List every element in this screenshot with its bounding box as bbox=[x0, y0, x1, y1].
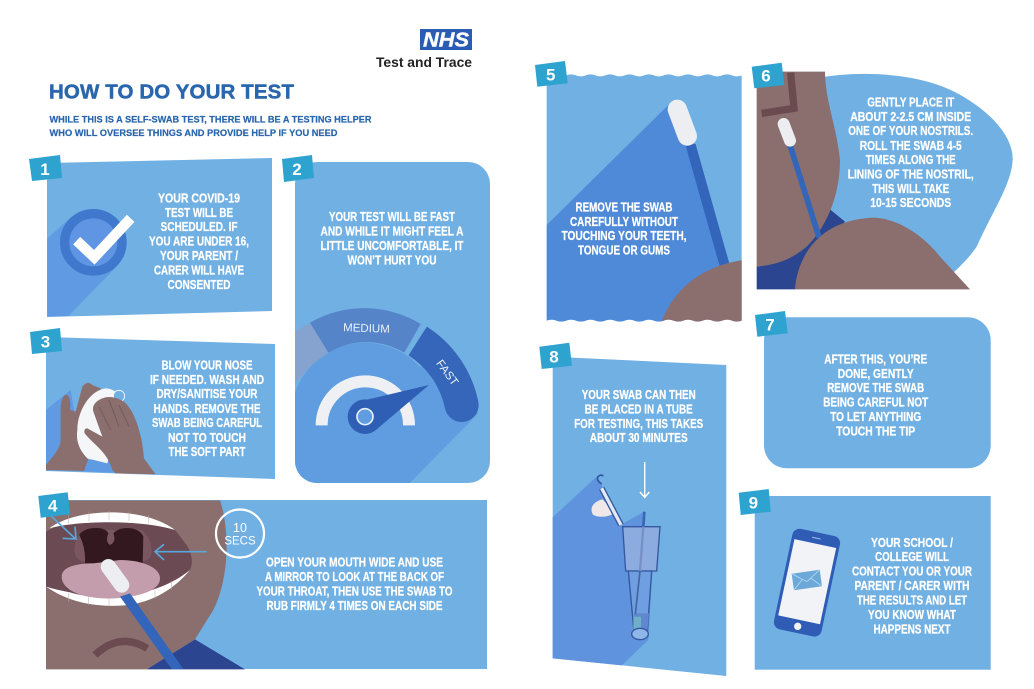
text: step 6: GENTLY PLACE IT bbox=[867, 96, 954, 110]
text: step 8 bbox=[574, 388, 703, 445]
text: step 7: TOUCH THE TIP bbox=[836, 424, 915, 438]
illustration: open mouth with swab bbox=[46, 511, 207, 669]
illustration: shadow behind tube bbox=[553, 477, 660, 665]
text: step 6: ROLL THE SWAB 4-5 bbox=[860, 139, 962, 153]
title: HOW TO DO YOUR TEST bbox=[49, 80, 294, 104]
text: step 9: YOUR SCHOOL / bbox=[871, 536, 953, 550]
badge 8 bbox=[539, 343, 572, 369]
text: step 7: REMOVE THE SWAB bbox=[827, 381, 924, 395]
text: step 2 bbox=[320, 210, 464, 268]
text: step 9: CONTACT YOU OR YOUR bbox=[852, 564, 972, 578]
text: step 2: YOUR TEST WILL BE FAST bbox=[329, 210, 455, 224]
panel: step 9 bbox=[739, 489, 991, 670]
text: step 1: YOUR PARENT / bbox=[160, 249, 238, 263]
NHS Test and Trace logo bbox=[376, 29, 472, 70]
badge 2: 2 bbox=[292, 160, 302, 179]
badge 9: 9 bbox=[749, 494, 758, 512]
text: step 3: DRY/SANITISE YOUR bbox=[156, 387, 258, 401]
timer: 10 secs bbox=[216, 510, 264, 558]
text: step 3: IF NEEDED. WASH AND bbox=[150, 373, 264, 387]
badge 4 bbox=[38, 492, 70, 518]
panel: step 3 bbox=[30, 328, 275, 479]
panel: step 2 bbox=[282, 155, 490, 491]
gauge illustration bbox=[291, 308, 479, 491]
text: step 6: LINING OF THE NOSTRIL, bbox=[848, 168, 974, 182]
text: step 8: BE PLACED IN A TUBE bbox=[585, 402, 693, 416]
text: step 9 bbox=[852, 536, 972, 636]
arrow: down into tube bbox=[640, 462, 649, 498]
panel: step 5 bbox=[535, 61, 743, 325]
text: step 9: PARENT / CARER WITH bbox=[854, 579, 970, 593]
text: step 9: YOU KNOW WHAT bbox=[868, 608, 956, 622]
illustration: swab and test tube bbox=[592, 475, 660, 640]
text: step 6: TIMES ALONG THE bbox=[866, 153, 956, 167]
text: step 3: HANDS. REMOVE THE bbox=[154, 402, 260, 416]
badge 4: 4 bbox=[48, 496, 58, 516]
text: step 4 bbox=[256, 556, 453, 613]
badge 1 bbox=[29, 155, 62, 181]
illustration: blob, face and swab bbox=[757, 72, 1013, 289]
text: step 2: WON’T HURT YOU bbox=[348, 254, 436, 268]
text: step 5: REMOVE THE SWAB bbox=[576, 200, 672, 214]
text: step 7: TO LET ANYTHING bbox=[830, 410, 921, 424]
text: step 5: CAREFULLY WITHOUT bbox=[570, 215, 678, 229]
text: step 9: HAPPENS NEXT bbox=[874, 622, 951, 636]
text: step 4: OPEN YOUR MOUTH WIDE AND USE bbox=[266, 556, 443, 570]
badge 7 bbox=[755, 311, 788, 337]
NHS Test and Trace logo: NHS bbox=[423, 30, 470, 52]
illustration: face and collar bbox=[46, 500, 245, 669]
text: step 6: THIS WILL TAKE bbox=[872, 182, 949, 196]
text: step 1: CONSENTED bbox=[168, 278, 230, 292]
text: step 3 bbox=[150, 358, 264, 459]
badge 8: 8 bbox=[549, 348, 559, 366]
badge 7: 7 bbox=[765, 316, 775, 334]
text: step 8: YOUR SWAB CAN THEN bbox=[582, 388, 696, 402]
text: step 1: TEST WILL BE bbox=[165, 206, 233, 220]
text: step 1 bbox=[149, 192, 249, 292]
text: step 4: A MIRROR TO LOOK AT THE BACK OF bbox=[265, 570, 444, 584]
text: step 6: 10-15 SECONDS bbox=[870, 196, 951, 210]
badge 5 bbox=[535, 61, 568, 87]
text: step 3: THE SOFT PART bbox=[168, 445, 246, 459]
panel: step 8 bbox=[539, 343, 726, 676]
text: step 3: SWAB BEING CAREFUL bbox=[152, 416, 262, 430]
badge 6 bbox=[752, 63, 784, 88]
panel: step 6 bbox=[752, 63, 1013, 289]
text: step 7: BEING CAREFUL NOT bbox=[823, 396, 928, 410]
subtitle bbox=[50, 114, 372, 139]
NHS Test and Trace logo: Test and Trace bbox=[376, 54, 472, 70]
subtitle: WHILE THIS IS A SELF-SWAB TEST, THERE WILL BE A TESTING HELPER bbox=[50, 114, 372, 126]
text: step 1: CARER WILL HAVE bbox=[154, 264, 244, 278]
illustration: swab with wavy-edged background bbox=[546, 70, 743, 325]
text: step 5: TONGUE OR GUMS bbox=[578, 244, 670, 258]
text: step 6: ONE OF YOUR NOSTRILS. bbox=[848, 124, 973, 138]
text: step 7: DONE, GENTLY bbox=[838, 367, 914, 381]
text: step 3: BLOW YOUR NOSE bbox=[162, 358, 252, 372]
badge 6: 6 bbox=[761, 66, 771, 86]
badge 2 bbox=[282, 155, 314, 182]
text: step 5: TOUCHING YOUR TEETH, bbox=[562, 229, 686, 243]
text: step 2: LITTLE UNCOMFORTABLE, IT bbox=[320, 239, 464, 253]
badge 3 bbox=[30, 328, 62, 354]
illustration: hands washing bbox=[46, 383, 156, 474]
text: step 7: AFTER THIS, YOU’RE bbox=[824, 352, 927, 366]
text: step 7 bbox=[823, 352, 928, 438]
text: step 4: YOUR THROAT, THEN USE THE SWAB TO bbox=[256, 584, 453, 598]
panel: step 7 bbox=[755, 311, 991, 468]
text: step 1: SCHEDULED. IF bbox=[160, 220, 238, 234]
panel: step 4 bbox=[38, 492, 487, 669]
text: step 1: YOUR COVID-19 bbox=[158, 192, 240, 206]
text: step 6: ABOUT 2-2.5 CM INSIDE bbox=[850, 110, 971, 124]
text: step 3: NOT TO TOUCH bbox=[168, 431, 246, 445]
badge 5: 5 bbox=[546, 66, 555, 84]
text: step 2: AND WHILE IT MIGHT FEEL A bbox=[320, 224, 464, 238]
gauge label: fast: FAST bbox=[433, 358, 460, 388]
badge 3: 3 bbox=[41, 332, 50, 352]
icon: phone with envelope bbox=[773, 527, 841, 638]
gauge label: medium: MEDIUM bbox=[343, 322, 390, 336]
timer: 10 secs: SECS bbox=[224, 536, 256, 548]
text: step 9: THE RESULTS AND LET bbox=[857, 594, 967, 608]
text: step 9: COLLEGE WILL bbox=[875, 550, 949, 564]
text: step 5 bbox=[562, 200, 686, 258]
text: step 4: RUB FIRMLY 4 TIMES ON EACH SIDE bbox=[266, 599, 442, 613]
icon: check mark in circle bbox=[47, 214, 131, 317]
timer: 10 secs: 10 bbox=[233, 521, 247, 535]
subtitle: WHO WILL OVERSEE THINGS AND PROVIDE HELP IF YOU NEED bbox=[50, 128, 338, 139]
text: step 1: YOU ARE UNDER 16, bbox=[149, 234, 249, 248]
text: step 6 bbox=[848, 96, 974, 210]
badge 9 bbox=[739, 489, 771, 515]
panel: step 1 bbox=[29, 155, 272, 317]
badge 1: 1 bbox=[40, 160, 50, 179]
text: step 8: FOR TESTING, THIS TAKES bbox=[574, 417, 703, 431]
text: step 8: ABOUT 30 MINUTES bbox=[590, 431, 688, 445]
